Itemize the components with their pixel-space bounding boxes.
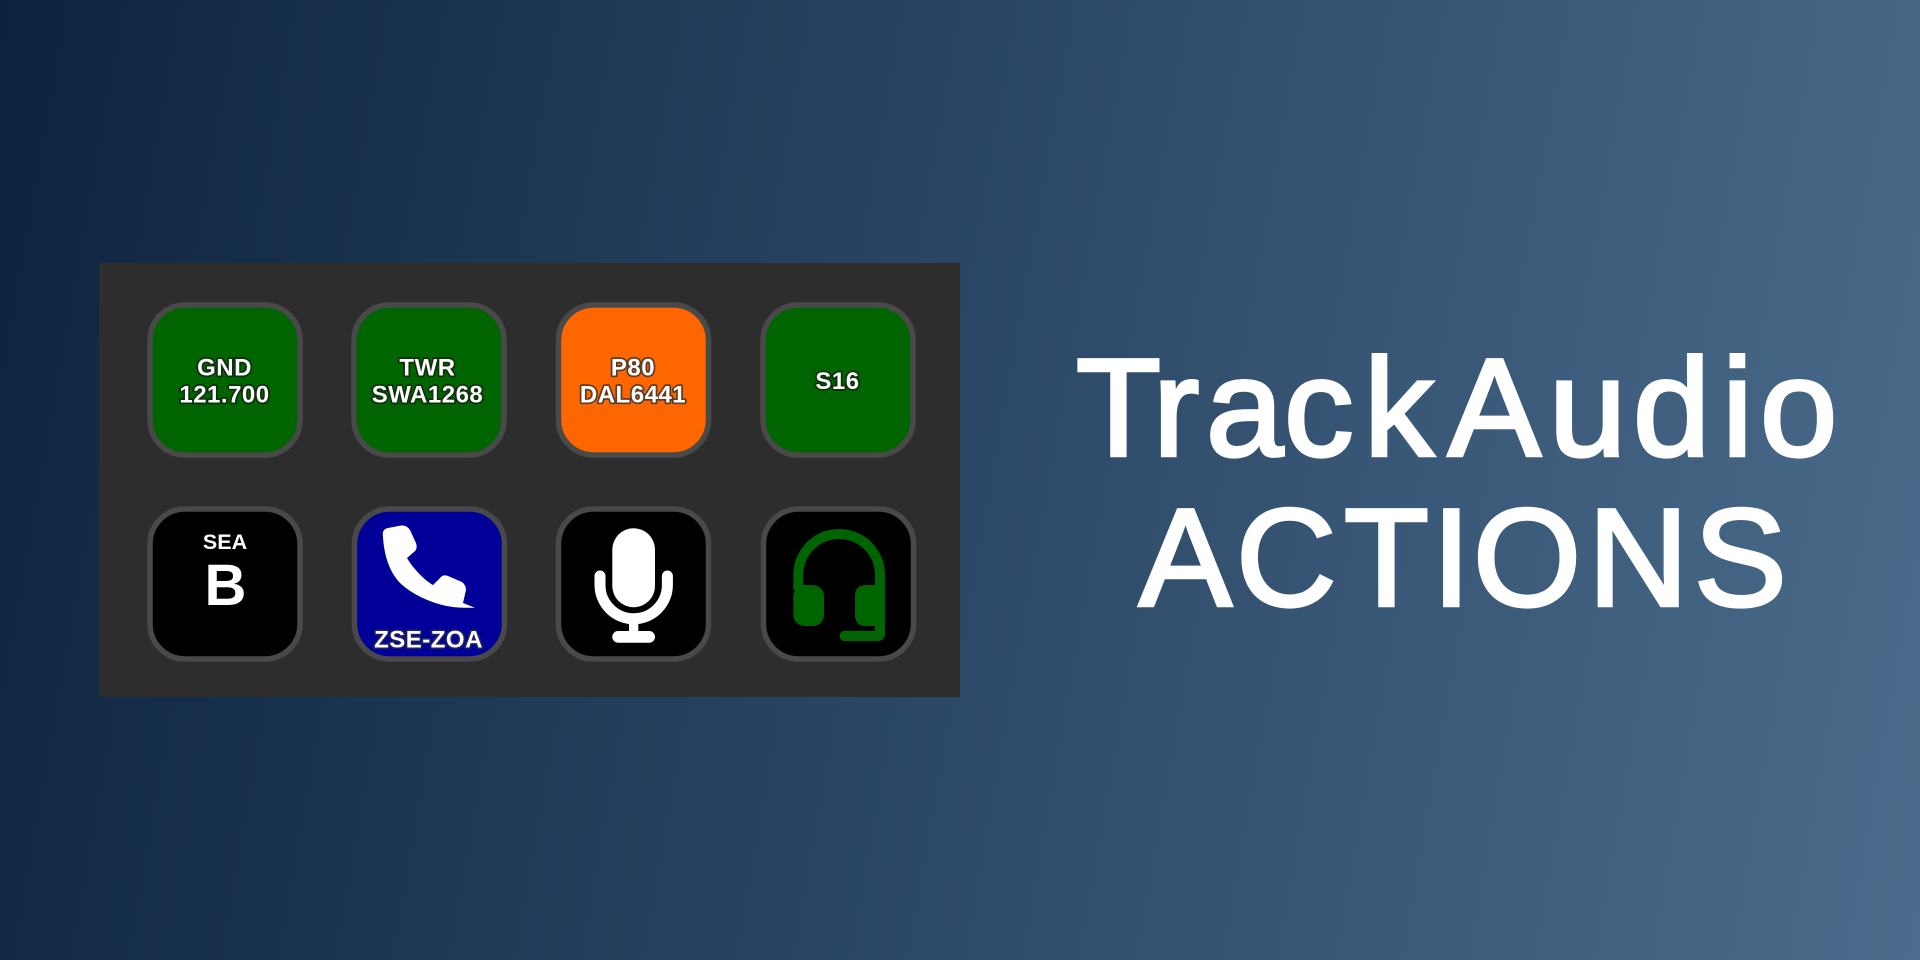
button: TWR SWA1268: TWR — [399, 354, 456, 382]
icon: microphone — [600, 528, 667, 643]
title: ACTIONS: ACTIONS — [1139, 480, 1787, 636]
icon: phone handset — [383, 525, 475, 608]
button: headset — [764, 509, 914, 659]
button: TWR SWA1268: SWA1268 — [372, 382, 483, 408]
title: TrackAudio: TrackAudio — [1076, 330, 1837, 486]
button: ZSE-ZOA phone: ZSE-ZOA — [374, 626, 483, 654]
button: GND 121.700: GND — [197, 354, 252, 382]
button: SEA B: SEA — [203, 530, 247, 554]
button: P80 DAL6441: P80 — [611, 354, 655, 382]
button: GND 121.700 — [150, 305, 300, 455]
button: microphone — [558, 509, 708, 659]
button: P80 DAL6441 — [558, 305, 708, 455]
panel: stream deck — [99, 263, 960, 697]
button: SEA B — [150, 509, 300, 659]
icon: headset — [793, 534, 885, 641]
button: TWR SWA1268 — [354, 305, 504, 455]
button: GND 121.700: 121.700 — [179, 382, 270, 408]
button: S16: S16 — [815, 368, 860, 395]
button: S16 — [763, 305, 913, 455]
button: SEA B: B — [205, 553, 246, 618]
button: P80 DAL6441: DAL6441 — [580, 382, 686, 408]
button: ZSE-ZOA phone — [354, 509, 504, 659]
